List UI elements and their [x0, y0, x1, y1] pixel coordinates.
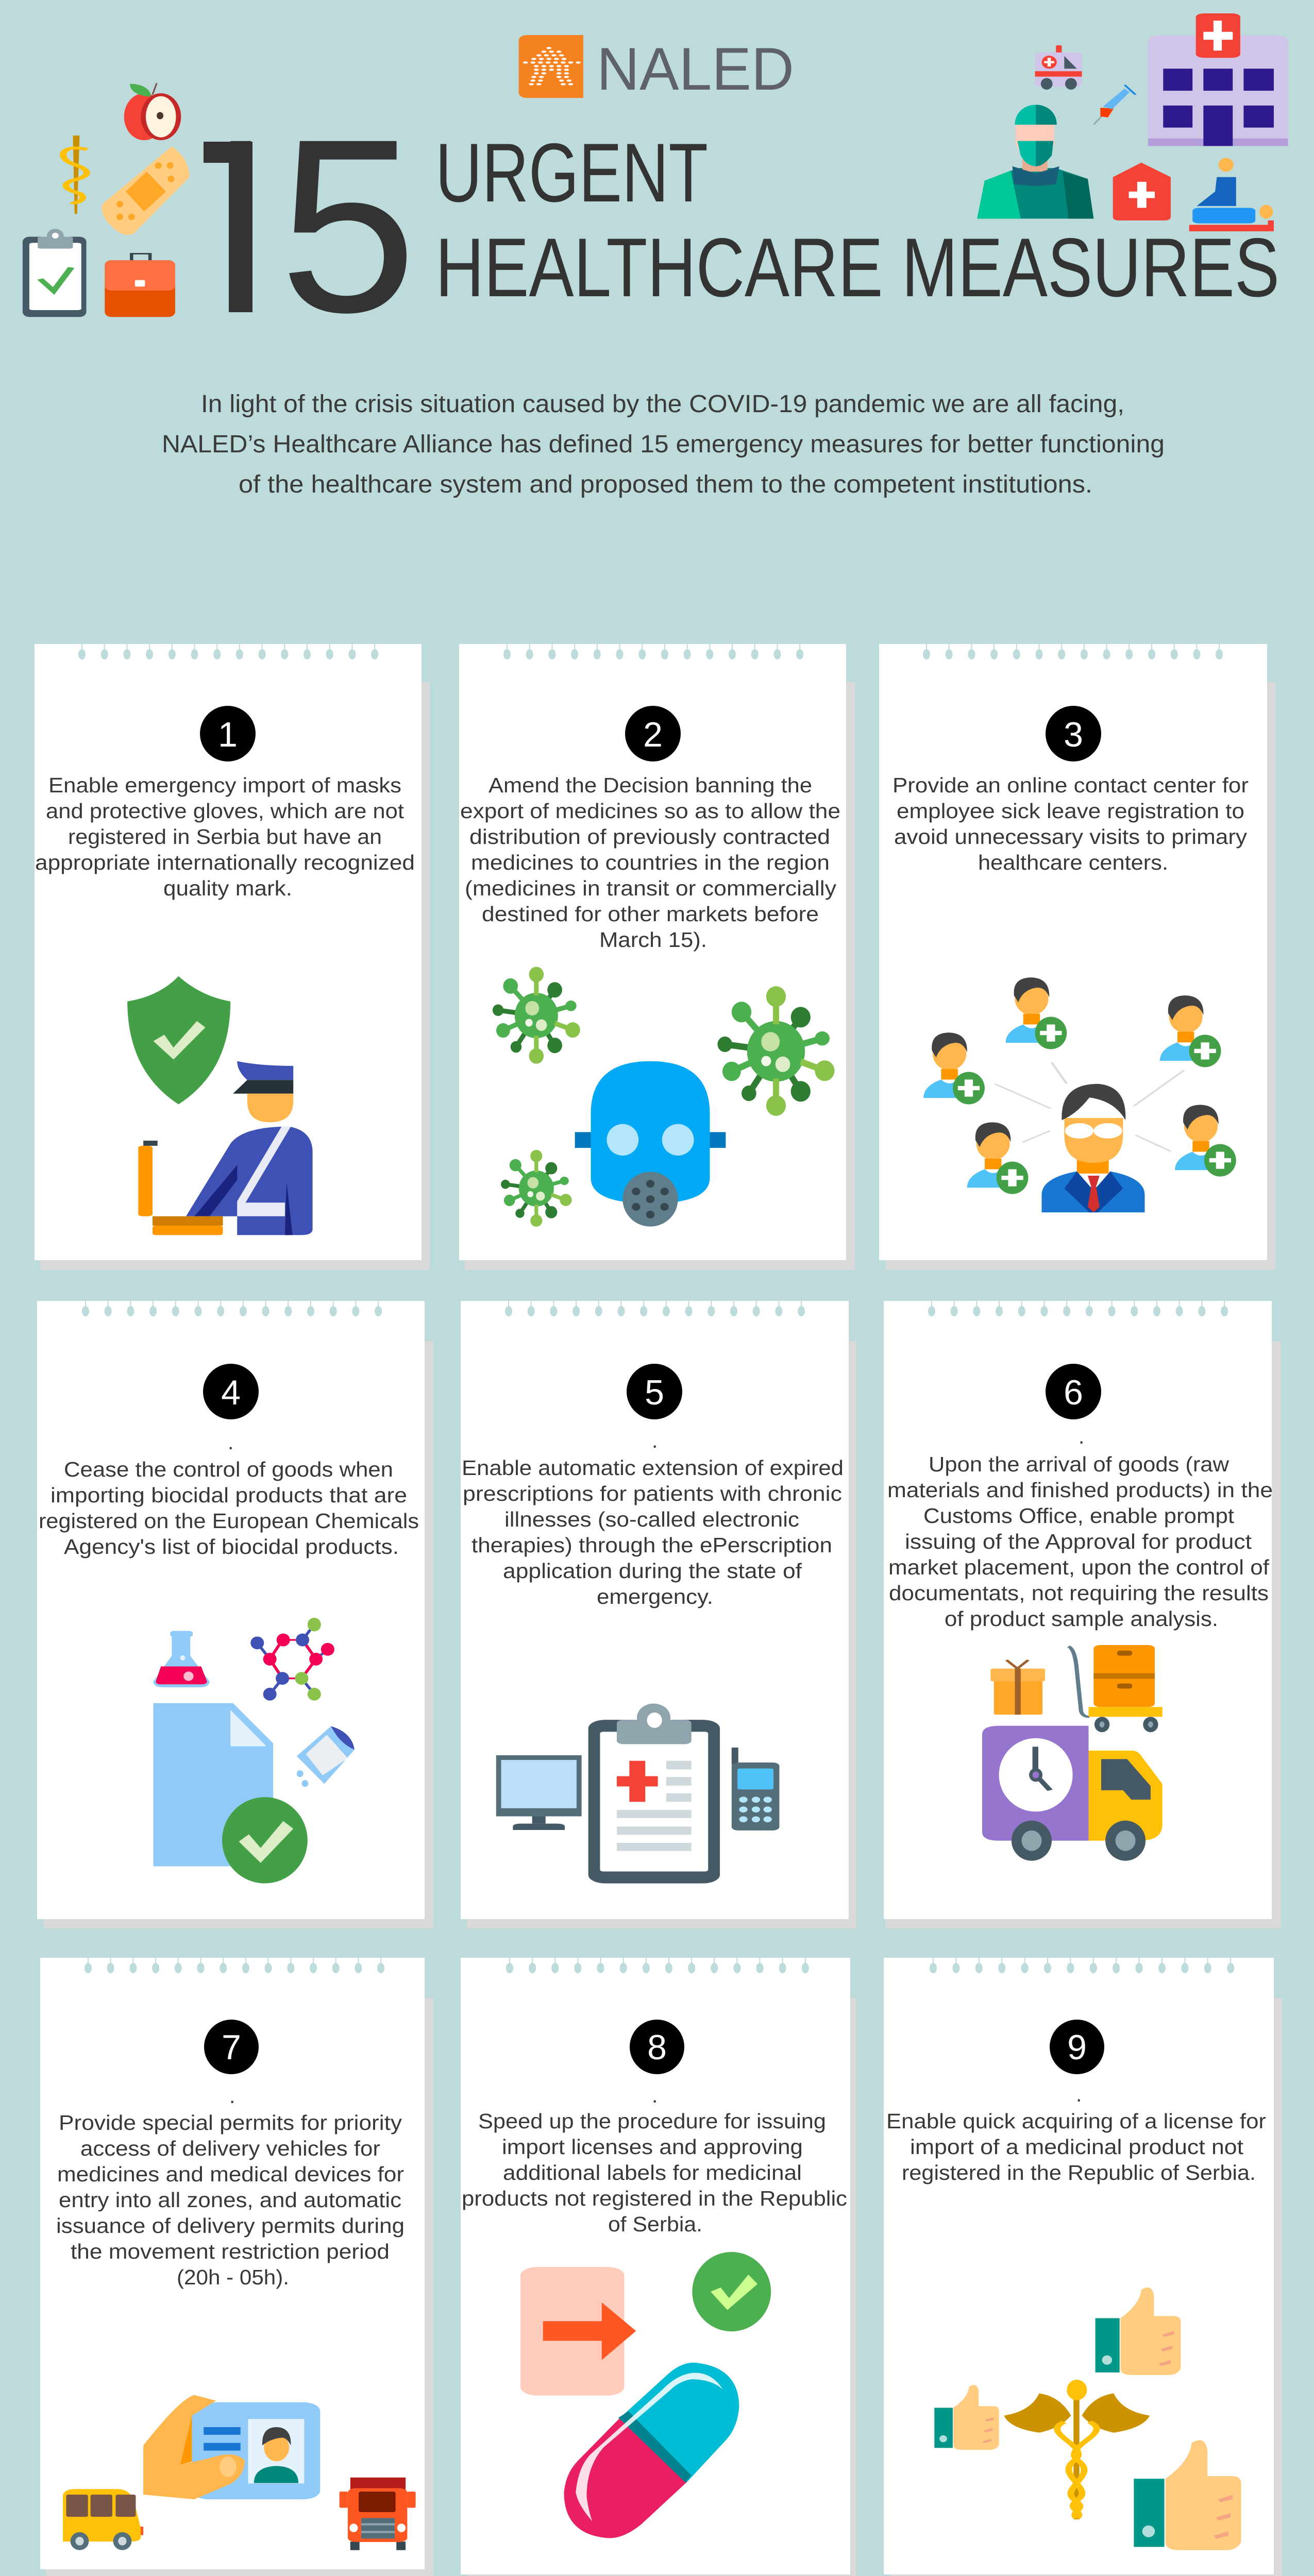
number badge 6: 6: [1064, 1373, 1083, 1412]
text block: measure 8: .: [652, 2083, 658, 2107]
text block: measure 6: Customs Office, enable prompt: [923, 1504, 1235, 1528]
text block: measure 6: .: [1079, 1425, 1084, 1448]
icon: caduceus and thumbs up: [934, 2287, 1241, 2550]
text block: measure 2: Amend the Decision banning the: [488, 773, 812, 797]
intro text: NALED’s Healthcare Alliance has defined 15 emergency measures for better functioning: [162, 431, 1165, 458]
text block: measure 7: issuance of delivery permits during: [56, 2214, 405, 2238]
panel: measure 3: [879, 644, 1275, 1270]
panel: measure 1: [35, 644, 430, 1270]
text block: measure 8: of Serbia.: [608, 2212, 702, 2236]
icon: doctor network: [923, 977, 1236, 1212]
text block: measure 7: [56, 2084, 405, 2289]
text block: measure 2: destined for other markets before: [482, 902, 819, 926]
number badge 3: 3: [1064, 715, 1083, 754]
text block: measure 2: (medicines in transit or commercially: [465, 876, 837, 900]
title: big number 15: 5: [279, 87, 417, 364]
icon: ambulance: [1035, 45, 1082, 90]
icon: apple: [124, 83, 181, 140]
text block: measure 6: materials and finished products) in the: [887, 1478, 1273, 1502]
text block: measure 5: Enable automatic extension of expired: [462, 1456, 844, 1480]
panel: measure 4: [37, 1301, 433, 1928]
title: big number 15: 1: [167, 87, 305, 364]
text block: measure 4: importing biocidal products that are: [50, 1483, 407, 1507]
text block: measure 5: prescriptions for patients with chronic: [463, 1482, 842, 1505]
text block: measure 6: issuing of the Approval for product: [905, 1530, 1252, 1553]
text block: measure 1: and protective gloves, which are not: [46, 799, 405, 823]
logo: NALED: NALED: [597, 35, 794, 103]
text block: measure 9: [886, 2082, 1266, 2184]
text block: measure 7: the movement restriction period: [71, 2240, 390, 2263]
text block: measure 1: registered in Serbia but have an: [68, 825, 382, 849]
number badge 9: 9: [1067, 2028, 1087, 2067]
icon: shield and customs officer: [127, 976, 313, 1235]
icon: hospital: [1148, 13, 1288, 146]
text block: measure 5: [462, 1429, 844, 1608]
icon: patient on bed: [1189, 158, 1274, 231]
icon: clipboard with check: [23, 229, 87, 317]
text block: measure 3: Provide an online contact center for: [892, 773, 1249, 797]
text block: measure 9: registered in the Republic of Serbia.: [902, 2161, 1256, 2184]
text block: measure 6: documentats, not requiring the results: [889, 1581, 1269, 1605]
icon: viruses and gas mask: [493, 967, 835, 1227]
text block: measure 2: distribution of previously contracted: [469, 825, 830, 849]
number badge 4: [203, 1364, 259, 1419]
text block: measure 7: entry into all zones, and automatic: [59, 2188, 401, 2212]
text block: measure 2: March 15).: [599, 928, 707, 952]
number badge 8: 8: [647, 2028, 667, 2067]
number badge 1: [200, 706, 256, 761]
text block: measure 9: .: [1076, 2082, 1082, 2106]
icon: surgeon: [977, 105, 1093, 218]
number badge 2: [625, 706, 681, 761]
text block: measure 1: appropriate internationally recognized: [35, 851, 415, 874]
number badge 9: [1050, 2020, 1104, 2074]
title: URGENT HEALTHCARE MEASURES: [435, 126, 1279, 314]
text block: measure 1: quality mark.: [163, 876, 292, 900]
text block: measure 1: Enable emergency import of masks: [48, 773, 401, 797]
panel: measure 9: [884, 1958, 1282, 2576]
text block: measure 8: import licenses and approving: [502, 2135, 803, 2159]
text block: measure 6: of product sample analysis.: [945, 1607, 1218, 1631]
panel: measure 7: [40, 1958, 433, 2576]
icon: caduceus: [63, 135, 87, 214]
number badge 5: 5: [645, 1373, 664, 1412]
text block: measure 7: (20h - 05h).: [177, 2265, 289, 2289]
text block: measure 8: [462, 2083, 847, 2236]
panel: measure 2: [459, 644, 855, 1270]
icon: permit card, bus and truck: [63, 2395, 416, 2550]
intro text: of the healthcare system and proposed them to the competent institutions.: [239, 471, 1092, 498]
intro text: In light of the crisis situation caused by the COVID-19 pandemic we are all facing,: [201, 391, 1124, 418]
icon: red cross badge: [1113, 163, 1171, 221]
text block: measure 9: Enable quick acquiring of a license for: [886, 2109, 1266, 2133]
intro text: [162, 391, 1165, 498]
text block: measure 7: access of delivery vehicles for: [80, 2137, 380, 2160]
number badge 5: [627, 1364, 682, 1419]
text block: measure 5: illnesses (so-called electronic: [504, 1507, 799, 1531]
icon: monitor, medical chart, phone: [496, 1704, 779, 1884]
panel: measure 5: [461, 1301, 856, 1928]
panel: measure 8: [461, 1958, 856, 2576]
text block: measure 3: employee sick leave registration to: [897, 799, 1244, 823]
text block: measure 5: therapies) through the ePerscription: [471, 1533, 832, 1557]
icon: arrow, check mark and capsule: [520, 2252, 771, 2538]
text block: measure 5: application during the state of: [503, 1559, 802, 1583]
text block: measure 8: products not registered in the Republic: [462, 2187, 847, 2210]
text block: measure 3: avoid unnecessary visits to primary: [894, 825, 1248, 849]
icon: syringe: [1093, 85, 1136, 125]
text block: measure 7: .: [229, 2084, 235, 2108]
icon: gift, trolley and delivery truck: [982, 1645, 1163, 1861]
text block: measure 6: market placement, upon the control of: [888, 1555, 1270, 1579]
icon: flask, molecule, document: [154, 1618, 355, 1884]
text block: measure 4: .: [228, 1430, 233, 1454]
panel: measure 6: [884, 1301, 1281, 1928]
number badge 7: 7: [222, 2028, 241, 2067]
text block: measure 4: Agency's list of biocidal products.: [64, 1535, 399, 1558]
number badge 6: [1046, 1364, 1101, 1419]
number badge 4: 4: [221, 1373, 241, 1412]
text block: measure 2: medicines to countries in the region: [471, 851, 830, 874]
text block: measure 3: healthcare centers.: [978, 851, 1168, 874]
text block: measure 2: [460, 773, 840, 952]
text block: measure 3: [892, 773, 1249, 874]
text block: measure 4: registered on the European Chemicals: [39, 1509, 419, 1533]
text block: measure 2: export of medicines so as to allow the: [460, 799, 840, 823]
number badge 8: [630, 2020, 684, 2074]
text block: measure 5: emergency.: [597, 1585, 713, 1608]
text block: measure 5: .: [652, 1429, 658, 1452]
text block: measure 7: medicines and medical devices for: [57, 2162, 404, 2186]
text block: measure 4: [39, 1430, 419, 1558]
title: URGENT HEALTHCARE MEASURES: URGENT: [435, 126, 708, 219]
number badge 3: [1046, 706, 1101, 761]
text block: measure 4: Cease the control of goods when: [64, 1458, 393, 1481]
icon: bandage: [102, 146, 190, 235]
title: big number 15: [204, 141, 407, 314]
number badge 7: [204, 2020, 259, 2074]
text block: measure 7: Provide special permits for priority: [59, 2111, 402, 2134]
text block: measure 6: Upon the arrival of goods (raw: [929, 1452, 1229, 1476]
text block: measure 8: additional labels for medicinal: [503, 2161, 802, 2184]
icon: briefcase: [105, 253, 175, 317]
text block: measure 9: import of a medicinal product not: [910, 2135, 1244, 2159]
number badge 1: 1: [218, 715, 238, 754]
text block: measure 6: [887, 1425, 1273, 1631]
number badge 2: 2: [643, 715, 663, 754]
text block: measure 8: Speed up the procedure for issuing: [478, 2109, 826, 2133]
text block: measure 1: [35, 773, 415, 900]
